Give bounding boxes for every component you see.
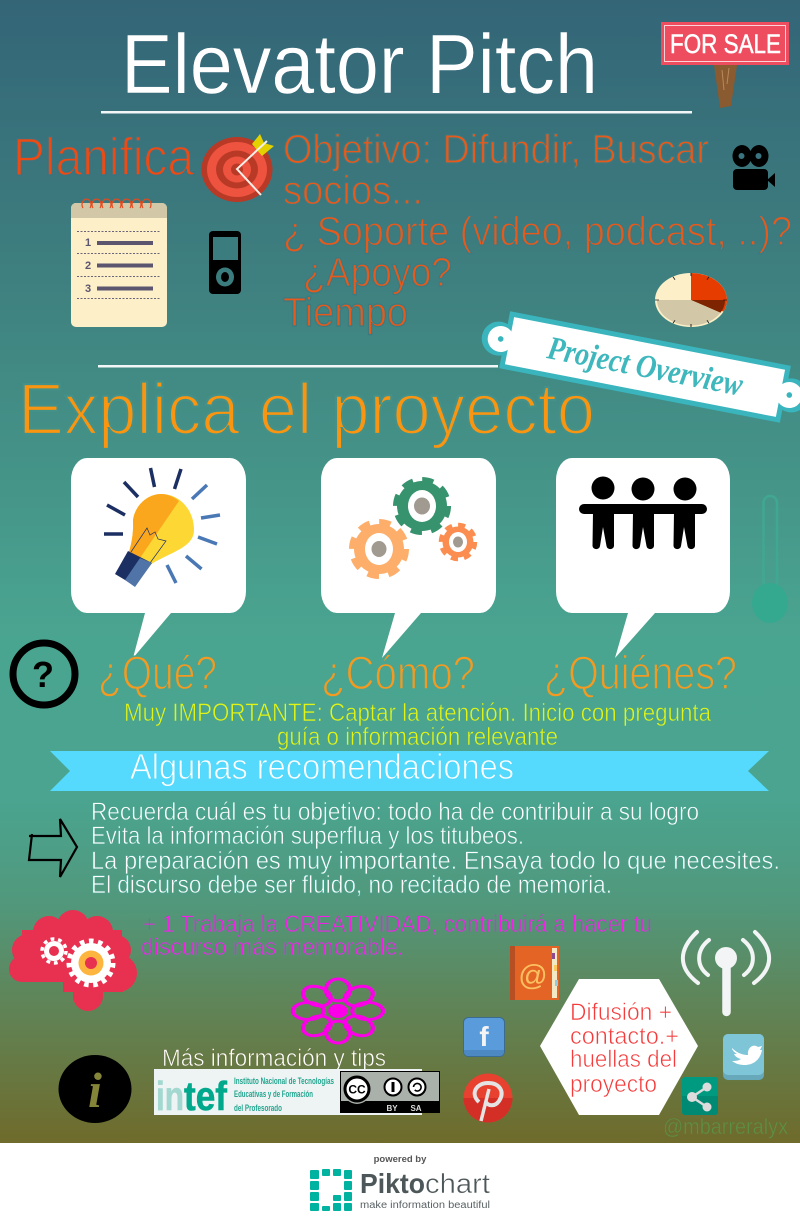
- icon: three people: [579, 476, 707, 549]
- footer: piktochart branding: make information beautiful: [360, 1200, 490, 1211]
- logo: piktochart mark: [310, 1169, 352, 1211]
- logo: intef: in: [156, 1073, 184, 1119]
- panel: hexagon: [540, 979, 698, 1115]
- icon: cloud with gears: [9, 910, 137, 1011]
- icon: antenna: [683, 932, 769, 1012]
- text: mas informacion: Más información y tips: [162, 1045, 386, 1072]
- icon: outlined arrow: [29, 819, 77, 877]
- callout: muy importante: [124, 699, 711, 751]
- panel: speech bubble quienes: [556, 458, 730, 658]
- text block: recommendations: Evita la información superflua y los titubeos.: [91, 822, 524, 850]
- labels: que, como, quienes: ¿Quiénes?: [544, 646, 737, 699]
- title: Elevator Pitch: [121, 17, 598, 111]
- banner: algunas recomendaciones: [50, 746, 769, 791]
- heading: Explica el proyecto: Explica el proyecto: [18, 370, 595, 450]
- icon: thermometer: [752, 496, 788, 623]
- text block: creatividad: + 1 Trabaja la CREATIVIDAD, contribuirá a hacer tu: [143, 911, 652, 938]
- footer: piktochart branding: Pikto: [360, 1168, 425, 1199]
- banner: algunas recomendaciones: Algunas recomendaciones: [130, 746, 514, 787]
- icon: question mark: ?: [32, 654, 54, 695]
- logo: intef: Educativas y de Formación: [234, 1089, 313, 1099]
- panel: speech bubble como: [321, 458, 496, 658]
- labels: que, como, quienes: [98, 646, 737, 699]
- text block: recommendations: Recuerda cuál es tu objetivo: todo ha de contribuir a su logro: [91, 798, 699, 826]
- panel: hexagon: proyecto: [570, 1071, 657, 1098]
- icon: light bulb: [104, 468, 220, 587]
- icon: facebook: f: [479, 1021, 489, 1052]
- icon: clock: [655, 273, 727, 327]
- text block: recommendations: La preparación es muy importante. Ensaya todo lo que necesites.: [91, 847, 780, 875]
- icon: pinterest: [464, 1074, 512, 1122]
- panel: speech bubble que: [71, 458, 246, 658]
- panel: hexagon: huellas del: [570, 1046, 677, 1073]
- labels: que, como, quienes: ¿Qué?: [98, 646, 217, 699]
- heading: Planifica: Planifica: [13, 128, 194, 187]
- text block: planning questions: Tiempo: [283, 289, 408, 335]
- text block: recommendations: [91, 798, 780, 899]
- text block: planning questions: socios...: [283, 167, 423, 213]
- labels: que, como, quienes: ¿Cómo?: [321, 646, 475, 699]
- icon: notepad: [71, 199, 167, 327]
- icon: twitter: [723, 1034, 764, 1080]
- text block: creatividad: [141, 911, 652, 961]
- icon: share: [682, 1077, 718, 1115]
- text block: planning questions: ¿Apoyo?: [303, 249, 452, 295]
- panel: hexagon: Difusión +: [570, 999, 672, 1026]
- icon: film camera: [732, 145, 775, 190]
- icon: information: [58, 1055, 132, 1123]
- icon: address book: @: [518, 960, 548, 992]
- logo: creative commons: SA: [410, 1104, 422, 1113]
- text: author handle: @mbarreralyx: [663, 1114, 788, 1139]
- callout: muy importante: Muy IMPORTANTE: Captar la atención. Inicio con pregunta: [124, 699, 711, 727]
- logo: creative commons: CC: [348, 1082, 366, 1096]
- footer: piktochart branding: [310, 1154, 490, 1211]
- text block: planning questions: [283, 126, 792, 335]
- icon: facebook: [464, 1018, 504, 1056]
- callout: muy importante: guía o información relevante: [277, 723, 558, 751]
- text block: planning questions: Objetivo: Difundir, Buscar: [283, 126, 709, 172]
- footer: piktochart branding: powered by: [374, 1154, 427, 1165]
- text block: recommendations: El discurso debe ser fluido, no recitado de memoria.: [91, 871, 612, 899]
- icon: gears: [352, 480, 475, 576]
- icon: question mark: [13, 643, 75, 705]
- text block: creatividad: discurso más memorable.: [141, 934, 404, 961]
- footer: piktochart branding: chart: [425, 1168, 490, 1199]
- logo: creative commons: [340, 1071, 440, 1113]
- icon: notepad: 3: [85, 283, 91, 295]
- icon: target with arrow: [202, 134, 274, 202]
- banner: project overview: Project Overview: [544, 330, 746, 404]
- icon: music player: [209, 231, 241, 294]
- panel: hexagon: contacto.+: [570, 1023, 679, 1050]
- icon: notepad: 1: [85, 237, 91, 249]
- icon: flower: [293, 979, 383, 1043]
- logo: intef: tef: [184, 1073, 227, 1119]
- logo: intef: [154, 1069, 422, 1119]
- icon: notepad: 2: [85, 260, 91, 272]
- icon: address book: [510, 946, 559, 1000]
- icon: for sale sign: FOR SALE: [670, 29, 781, 59]
- icon: for sale sign: [661, 22, 789, 108]
- logo: intef: del Profesorado: [234, 1103, 282, 1113]
- banner: project overview: [477, 307, 800, 427]
- icon: information: i: [88, 1062, 102, 1118]
- logo: intef: Instituto Nacional de Tecnologías: [234, 1076, 334, 1086]
- logo: creative commons: BY: [386, 1104, 398, 1113]
